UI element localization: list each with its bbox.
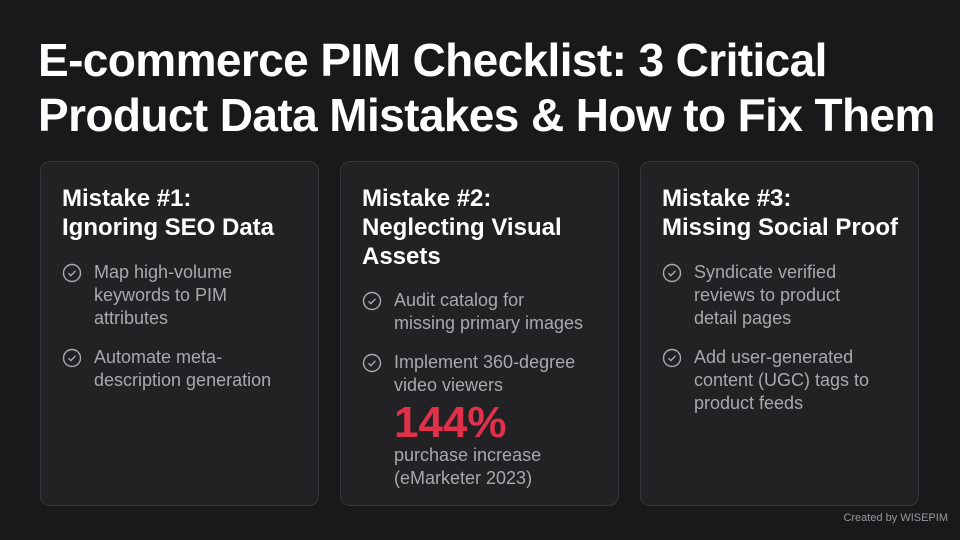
heading: mistake 1: Ignoring SEO Data <box>62 214 274 241</box>
bullet: syndicate reviews <box>662 262 840 328</box>
bullet: audit catalog: Audit catalog for <box>394 290 524 310</box>
bullet: UGC tags: content (UGC) tags to <box>694 370 869 390</box>
bullet: UGC tags: product feeds <box>694 393 803 413</box>
stat: 144%: 144% <box>394 398 507 447</box>
stat caption <box>394 445 541 488</box>
heading: mistake 2: Mistake #2: <box>362 185 491 212</box>
bullet: audit catalog: missing primary images <box>394 313 583 333</box>
panel: mistake 1 <box>40 161 319 506</box>
title: E-commerce PIM Checklist: 3 Critical <box>38 34 827 86</box>
heading: mistake 2: Assets <box>362 243 441 270</box>
title <box>38 34 935 141</box>
panel: mistake 3 <box>640 161 919 506</box>
bullet: automate meta: description generation <box>94 370 271 390</box>
bullet: syndicate reviews: Syndicate verified <box>694 262 836 282</box>
bullet: automate meta <box>62 347 271 390</box>
title: Product Data Mistakes & How to Fix Them <box>38 89 935 141</box>
heading: mistake 1 <box>62 185 274 241</box>
bullet: map keywords: attributes <box>94 308 168 328</box>
bullet: UGC tags <box>662 347 869 413</box>
heading: mistake 3: Missing Social Proof <box>662 214 898 241</box>
stat caption: purchase increase <box>394 445 541 465</box>
bullet: audit catalog <box>362 290 583 333</box>
heading: mistake 2: Neglecting Visual <box>362 214 562 241</box>
bullet: map keywords: keywords to PIM <box>94 285 227 305</box>
bullet: 360 video: video viewers <box>394 375 503 395</box>
heading: mistake 2 <box>362 185 562 270</box>
bullet: map keywords <box>62 262 232 328</box>
heading: mistake 3 <box>662 185 898 241</box>
bullet: automate meta: Automate meta- <box>94 347 222 367</box>
bullet: syndicate reviews: detail pages <box>694 308 791 328</box>
bullet: 360 video <box>362 352 575 395</box>
heading: mistake 3: Mistake #3: <box>662 185 791 212</box>
panel: mistake 2 <box>340 161 619 506</box>
bullet: UGC tags: Add user-generated <box>694 347 853 367</box>
bullet: syndicate reviews: reviews to product <box>694 285 840 305</box>
bullet: map keywords: Map high-volume <box>94 262 232 282</box>
heading: mistake 1: Mistake #1: <box>62 185 191 212</box>
stat caption: (eMarketer 2023) <box>394 468 532 488</box>
bullet: 360 video: Implement 360-degree <box>394 352 575 372</box>
credit: Created by WISEPIM <box>843 512 948 524</box>
